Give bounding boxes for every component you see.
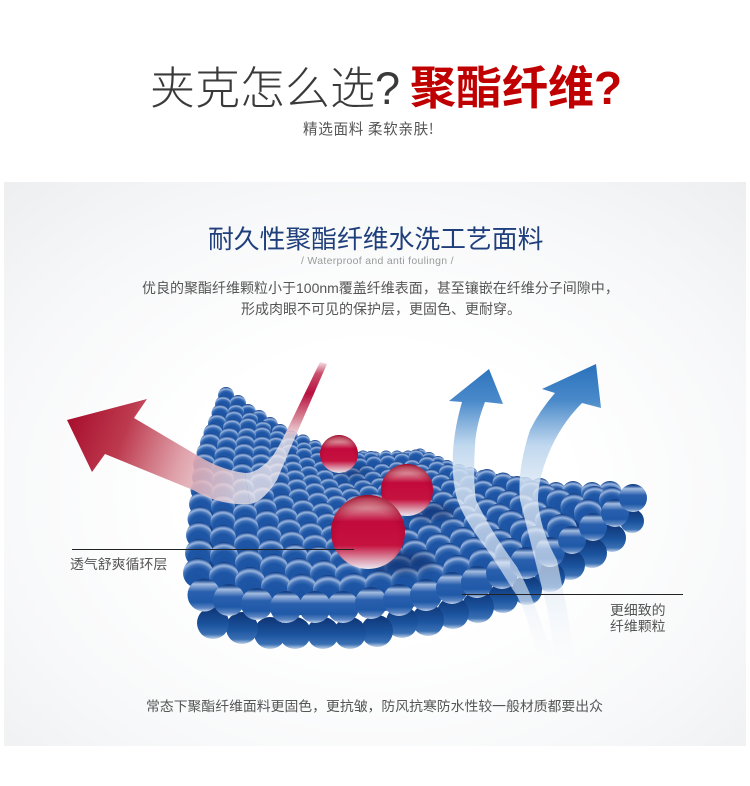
description line 2: 形成肉眼不可见的保护层，更固色、更耐穿。	[241, 299, 521, 319]
blue arrow: left	[449, 369, 552, 655]
fabric front row	[188, 484, 647, 623]
subtitle: 精选面料 柔软亲肤!	[303, 118, 434, 139]
description line 1: 优良的聚酯纤维颗粒小于100nm覆盖纤维表面，甚至镶嵌在纤维分子间隙中，	[142, 278, 619, 298]
red sphere: small	[320, 435, 358, 473]
panel: fabric section	[4, 182, 746, 746]
sphere shadows	[336, 467, 456, 573]
section heading: 耐久性聚酯纤维水洗工艺面料	[208, 226, 543, 254]
footer note: 常态下聚酯纤维面料更固色，更抗皱，防风抗寒防水性较一般材质都要出众	[146, 695, 603, 715]
red arrow: warm air out	[67, 362, 327, 504]
fabric top layer	[183, 387, 625, 605]
callout line: right	[462, 594, 683, 596]
red sphere: medium	[381, 464, 433, 516]
callout line: left	[72, 548, 354, 550]
title: 聚酯纤维?	[410, 52, 622, 118]
left callout label: 透气舒爽循环层	[70, 556, 167, 572]
red sphere: large	[331, 495, 405, 569]
title	[150, 52, 622, 118]
fabric base fill	[190, 398, 633, 615]
fabric lower layer	[197, 509, 644, 649]
section subheading: / Waterproof and anti foulingn /	[301, 255, 454, 267]
right callout label: 纤维颗粒	[610, 618, 666, 634]
right callout label: 更细致的	[610, 602, 666, 618]
title: 夹克怎么选?	[150, 52, 400, 117]
right callout label	[610, 602, 666, 634]
blue arrow: right	[519, 364, 601, 660]
